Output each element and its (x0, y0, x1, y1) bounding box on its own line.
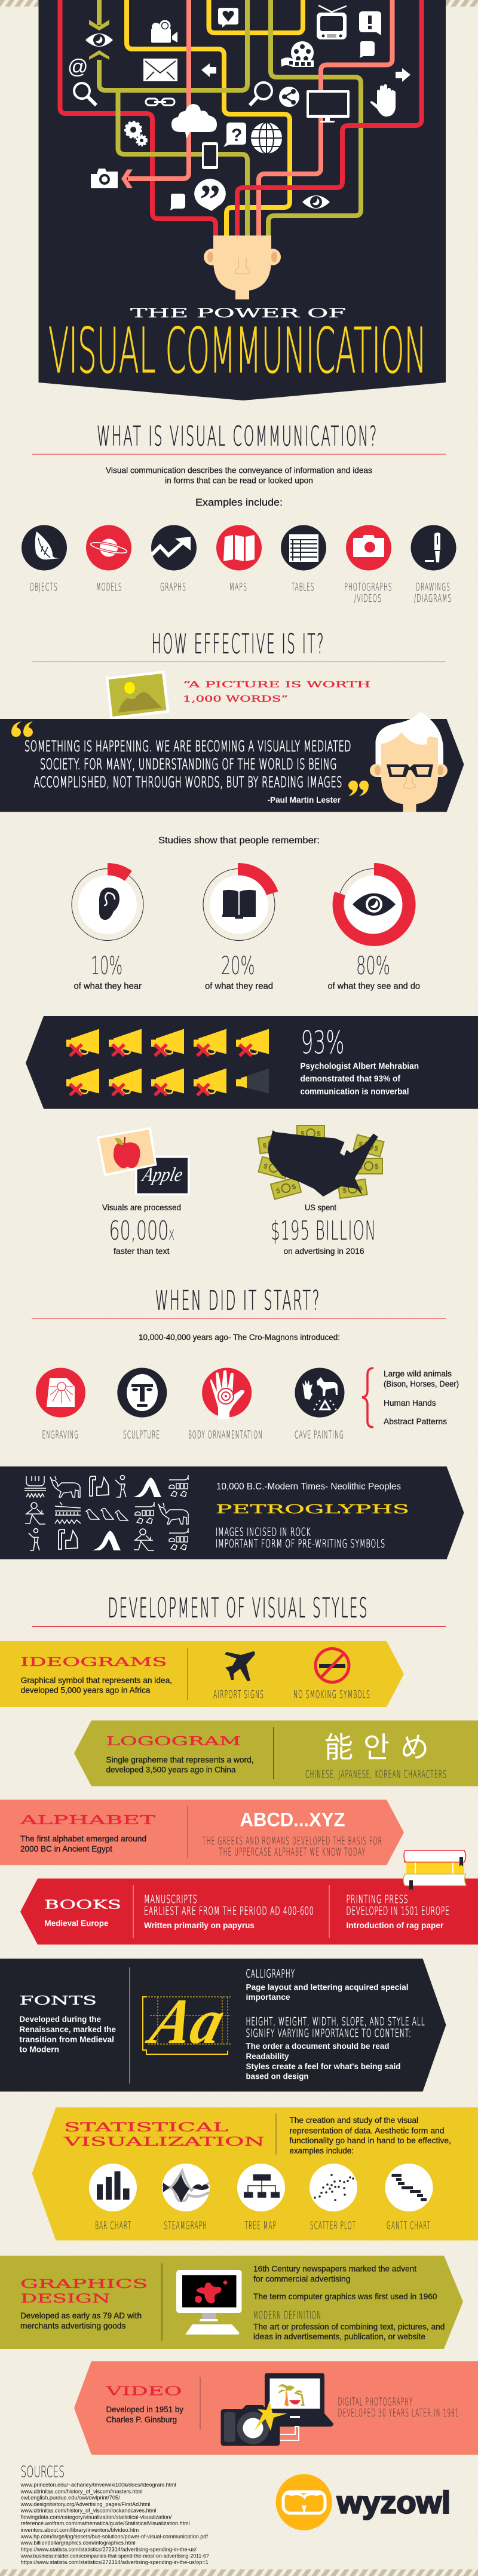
visuals stat: 60,000X (109, 1216, 174, 1246)
sources list: flowingdata.com/category/visualization/statistical-visualization/ (21, 2514, 172, 2520)
band description: Graphical symbol that represents an idea, (21, 1675, 172, 1685)
band description: functionality go hand in hand to be effective, (289, 2136, 451, 2145)
icon: cloud (171, 104, 217, 139)
band title (20, 2277, 148, 2306)
sources list: reference.wolfram.com/mathematica/guide/StatisticalVisualization.html (21, 2520, 190, 2526)
printing press text (347, 1893, 449, 1930)
labels: example types: OBJECTS (30, 581, 58, 593)
divider (329, 1885, 330, 1938)
band: statistical visualization (32, 2107, 478, 2240)
labels: prehistoric arts: BODY ORNAMENTATION (188, 1428, 263, 1442)
icon: at sign: @ (68, 56, 88, 78)
calligraphy text: Page layout and lettering acquired special (246, 1982, 409, 1991)
band title (63, 2120, 265, 2149)
icon: video camera (151, 20, 177, 43)
labels (95, 2220, 431, 2232)
labels: example types (30, 581, 452, 605)
band title: FONTS (19, 1993, 97, 2008)
icon: question bubble: ? (231, 126, 242, 145)
icon: tree map (237, 2164, 285, 2211)
quote: picture worth: 1,000 WORDS” (183, 695, 288, 704)
band title: GRAPHICS (20, 2277, 148, 2291)
icon: us map with money (258, 1125, 384, 1200)
labels: example types: /VIDEOS (354, 592, 382, 605)
divider (200, 2377, 201, 2430)
studies label: Studies show that people remember: (158, 836, 320, 846)
icon: gears (125, 122, 147, 146)
cave painting subjects: (Bison, Horses, Deer) (384, 1379, 459, 1388)
variation text (246, 2015, 425, 2081)
wordmark: wyzowl (336, 2485, 451, 2520)
icon: steamgraph (162, 2164, 210, 2211)
labels (213, 1688, 370, 1701)
labels: BAR CHART (95, 2220, 131, 2232)
variation text: based on design (246, 2072, 308, 2081)
band shape (74, 2361, 478, 2455)
advertising stat: US spent (305, 1203, 336, 1212)
band description: representation of data. Aesthetic form and (289, 2125, 445, 2135)
icon: body ornamentation hand (202, 1367, 252, 1419)
icon: book stack (403, 1850, 466, 1890)
labels: example types: PHOTOGRAPHS (344, 581, 392, 593)
panel: lester quote banner (0, 719, 464, 812)
band: ideograms (0, 1641, 404, 1707)
band description: merchants advertising goods (20, 2321, 125, 2330)
band description: Renaissance, marked the (19, 2024, 116, 2034)
modern definition: MODERN DEFINITION (253, 2309, 321, 2321)
icon: bar chart (89, 2164, 137, 2211)
digital photography text (338, 2396, 459, 2419)
labels: example types: MAPS (229, 581, 247, 593)
icon: maps (216, 525, 262, 570)
CJK characters: め (400, 1732, 429, 1764)
band description (289, 2115, 451, 2155)
logo: wyzowl (276, 2474, 451, 2531)
stat values: 20% (221, 951, 255, 980)
title: the power of: THE POWER OF (130, 306, 346, 321)
stat captions: of what they see and do (327, 981, 420, 991)
labels: TREE MAP (245, 2220, 277, 2232)
stat captions: of what they hear (74, 981, 142, 991)
sources list: www.citrinitas.com/history_of_viscom/rockandcaves.html (20, 2508, 157, 2514)
petroglyphs text: 10,000 B.C.-Modern Times- Neolithic Peoples (216, 1482, 401, 1492)
band shape (20, 1879, 478, 1945)
icon: graphs arrow (151, 525, 197, 570)
icon: objects leaf (22, 525, 67, 570)
band description (20, 2311, 142, 2330)
quote: picture worth: “A PICTURE IS WORTH (183, 680, 370, 690)
CJK characters: 안 (363, 1732, 390, 1764)
icon: camera (91, 169, 118, 188)
cave painting subjects: Abstract Patterns (384, 1417, 447, 1426)
icon: cave painting (295, 1367, 344, 1418)
band title: VISUALIZATION (63, 2134, 265, 2149)
visuals stat (102, 1203, 181, 1256)
icon: envelope (143, 59, 177, 81)
band title: IDEOGRAMS (20, 1654, 167, 1669)
CJK characters: 能 (324, 1732, 353, 1764)
divider (273, 1727, 274, 1779)
modern definition (253, 2309, 445, 2341)
cave painting subjects: Large wild animals (384, 1369, 452, 1378)
petroglyphs text: PETROGLYPHS (216, 1502, 409, 1516)
icon: monitor (307, 90, 350, 123)
intro text: 10,000-40,000 years ago- The Cro-Magnons introduced: (139, 1332, 340, 1342)
icon: airplane (225, 1651, 255, 1681)
band description: transition from Medieval (19, 2035, 114, 2044)
manuscripts text: EARLIEST ARE FROM THE PERIOD AD 400-600 (144, 1904, 314, 1917)
definition text (106, 465, 372, 485)
icon: drawings pen (411, 525, 456, 570)
definition text: Visual communication describes the conveyance of information and ideas (106, 465, 372, 475)
variation text: Readability (246, 2051, 289, 2061)
chart: 20 percent book (203, 863, 278, 941)
icon: man with glasses (370, 712, 448, 812)
band description: Developed during the (19, 2014, 101, 2024)
icon grid: megaphones (66, 1029, 269, 1095)
nonverbal text: demonstrated that 93% of (300, 1073, 401, 1084)
examples label: Examples include: (195, 497, 283, 508)
divider (161, 2263, 163, 2341)
manuscripts text (144, 1893, 314, 1930)
band description: examples include: (289, 2146, 354, 2155)
visuals stat: Visuals are processed (102, 1203, 181, 1212)
bottom decorative stripe (0, 2569, 478, 2576)
modern definition: ideas in advertisements, publication, or website (253, 2332, 425, 2341)
band description (20, 1834, 146, 1853)
icon: sculpture mask (117, 1367, 167, 1418)
printing press text: PRINTING PRESS (347, 1893, 409, 1906)
labels: prehistoric arts: ENGRAVING (42, 1428, 79, 1442)
icon: apple word card: Apple (140, 1164, 185, 1186)
icon: magnifier left (74, 83, 96, 105)
calligraphy text (246, 1968, 409, 2002)
petroglyphs text: IMAGES INCISED IN ROCK (216, 1525, 311, 1538)
panel: sources (20, 2464, 209, 2565)
icon: engraving (36, 1367, 85, 1418)
panel: what is visual communication (22, 421, 456, 605)
icon: quote bubble: ” (200, 177, 220, 223)
band: logogram (74, 1720, 478, 1786)
sample letters: ABCD...XYZ (240, 1809, 345, 1830)
icon: heart bubble (218, 8, 238, 27)
icon: small speech bubble (360, 41, 375, 58)
sources list: https://www.statista.com/statistics/272314/advertising-spending-in-the-us/ (21, 2546, 197, 2552)
stat captions: of what they read (205, 981, 273, 991)
icon: eye bottom (302, 195, 330, 209)
band: books (20, 1850, 478, 1945)
icon: eye top (85, 33, 113, 47)
icon: arrow chevrons on olive pipe (89, 20, 109, 60)
icon: computer with paint blot (176, 2270, 241, 2335)
stat: 93 percent: 93% (301, 1024, 344, 1061)
labels: SCATTER PLOT (310, 2220, 356, 2232)
nonverbal text: communication is nonverbal (300, 1087, 409, 1097)
modern definition: The art or profession of combining text, pictures, and (253, 2321, 445, 2331)
calligraphy text: CALLIGRAPHY (246, 1968, 295, 1981)
quote: picture worth (183, 680, 370, 704)
icon: opening quote marks (11, 721, 33, 737)
icon: no smoking (315, 1648, 349, 1682)
sources list: www.hp.com/large/ipg/assets/bus-solutions/power-of-visual-communication.pdf (20, 2534, 208, 2540)
icon: apple word card (135, 1156, 190, 1195)
chart: 10 percent ear (72, 863, 143, 941)
band description (19, 2014, 116, 2054)
band title: VIDEO (105, 2384, 182, 2398)
top decorative stripe (0, 0, 478, 7)
band shape (0, 2256, 463, 2349)
icon: laptop and camera (221, 2373, 333, 2446)
band title: STATISTICAL (64, 2120, 229, 2134)
sources list: www.businessinsider.com/companies-that-spend-the-most-on-advertising-2011-6? (20, 2553, 209, 2559)
panel: hero banner (38, 0, 446, 400)
band title: DESIGN (20, 2292, 111, 2306)
icon: phone (202, 142, 218, 169)
icon: globe (251, 123, 282, 154)
band description: Developed in 1951 by (106, 2404, 183, 2414)
stat values: 10% (91, 951, 122, 980)
labels: example types: TABLES (292, 581, 314, 593)
band: video (74, 2361, 478, 2455)
history text: 16th Century newspapers marked the advent (253, 2264, 416, 2274)
labels: prehistoric arts: CAVE PAINTING (295, 1428, 344, 1442)
icon: models planet (86, 525, 131, 570)
icon: tables (281, 525, 326, 570)
stat values: 80% (356, 951, 390, 980)
variation text: The order a document should be read (246, 2041, 390, 2051)
printing press text: Introduction of rag paper (347, 1920, 444, 1930)
icon: photographs camera (346, 525, 391, 570)
chart: 80 percent eye (333, 863, 416, 946)
band description: 2000 BC in Ancient Egypt (20, 1844, 112, 1853)
cave painting subjects (384, 1369, 459, 1426)
icon: scatter plot (310, 2164, 357, 2211)
divider (129, 1968, 130, 2084)
divider (133, 1885, 134, 1938)
advertising stat (271, 1203, 376, 1256)
icons: petroglyph figures (24, 1475, 188, 1550)
band shape (0, 1641, 404, 1707)
band description (21, 1675, 172, 1695)
panel: petroglyphs band (0, 1467, 464, 1559)
icon: hand (370, 84, 396, 117)
band shape (74, 1720, 478, 1786)
calligraphy text: importance (246, 1992, 290, 2002)
sources list: inventors.about.com/library/inventors/blvideo.htm (21, 2527, 139, 2533)
heading rule (32, 1318, 446, 1319)
sources list: www.designhistory.org/Advertising_pages/FirstAd.html (20, 2501, 151, 2507)
band: fonts (0, 1959, 446, 2092)
panel: development of visual styles (0, 1592, 478, 2455)
band description: Charles P. Ginsburg (106, 2415, 177, 2424)
petroglyphs text (216, 1482, 409, 1550)
icon: owl badge (276, 2474, 332, 2531)
icon: film reel (281, 41, 314, 67)
quote attribution: -Paul Martin Lester (268, 795, 341, 804)
icon: apple photo (97, 1127, 157, 1176)
band description: developed 5,000 years ago in Africa (21, 1685, 151, 1695)
icon: gantt chart (385, 2164, 433, 2211)
history text: for commercial advertising (253, 2274, 350, 2283)
stat values (91, 951, 390, 980)
icon: picture (106, 671, 170, 720)
icon: calligraphy specimen: Aa (140, 1985, 232, 2057)
band subtitle: Medieval Europe (44, 1919, 109, 1928)
stat captions (74, 981, 420, 991)
nonverbal text (300, 1061, 419, 1097)
band shape (0, 1959, 446, 2092)
icon: closing quote marks (348, 781, 369, 796)
labels: STEAMGRAPH (164, 2220, 207, 2232)
heading rule (32, 1626, 446, 1627)
labels: NO SMOKING SYMBOLS (293, 1688, 370, 1701)
band description (106, 1755, 253, 1774)
band: statistical visualization: GANTT CHART (387, 2220, 431, 2232)
band: alphabet (0, 1800, 404, 1865)
panel: when did it start (0, 1285, 464, 1559)
labels: AIRPORT SIGNS (213, 1688, 264, 1701)
panel: nonverbal band (26, 1016, 478, 1109)
band shape (32, 2107, 478, 2240)
band description: Developed as early as 79 AD with (20, 2311, 142, 2320)
icon: right arrow (396, 68, 410, 82)
icon: salmon arrow head (121, 170, 133, 188)
sources list: www.billiondollargraphics.com/infographics.html (20, 2540, 136, 2546)
advertising stat: $195 BILLION (271, 1216, 376, 1246)
history text: The term computer graphics was first used in 1960 (253, 2292, 437, 2301)
band description: to Modern (19, 2044, 59, 2054)
band description: developed 3,500 years ago in China (106, 1764, 236, 1774)
icon: television (317, 5, 347, 39)
labels: prehistoric arts (42, 1428, 344, 1442)
sources list: owl.english.purdue.edu/owl/owlprint/705/ (21, 2495, 120, 2501)
cave painting subjects: Human Hands (384, 1398, 436, 1408)
band title: ALPHABET (19, 1813, 156, 1827)
labels: prehistoric arts: SCULPTURE (123, 1428, 160, 1442)
heading rule (32, 454, 446, 455)
sources list (20, 2482, 209, 2565)
band: graphics design (0, 2256, 463, 2349)
icon: exclamation bubble (359, 11, 381, 35)
icon: chain link (146, 99, 174, 105)
icon: question bubble (223, 123, 246, 147)
icon: red brace (362, 1368, 373, 1427)
advertising stat: on advertising in 2016 (283, 1246, 364, 1256)
icon: left arrow (201, 63, 216, 77)
sources list: https://www.statista.com/statistics/272314/advertising-spending-in-the-us/op=1 (21, 2559, 209, 2565)
manuscripts text: Written primarily on papyrus (144, 1920, 255, 1930)
definition text: in forms that can be read or looked upon (165, 476, 313, 485)
labels: example types: MODELS (96, 581, 122, 593)
icon: small speech bubble lower (170, 194, 185, 210)
manuscripts text: MANUSCRIPTS (144, 1893, 198, 1906)
band description (106, 2404, 183, 2424)
icon: head (204, 235, 281, 299)
caption (203, 1835, 382, 1859)
band description: The creation and study of the visual (289, 2115, 418, 2125)
icon: magnifier right (250, 82, 272, 105)
nonverbal text: Psychologist Albert Mehrabian (300, 1061, 419, 1071)
panel: how effective is it (0, 628, 478, 1256)
band shape (0, 1800, 404, 1865)
quote text (24, 738, 351, 791)
sources list: www.princeton.edu/~achaney/tmve/wiki100k/docs/Ideogram.html (20, 2482, 176, 2488)
pipes (60, 0, 422, 235)
history text (253, 2264, 437, 2301)
sources heading: SOURCES (20, 2464, 65, 2482)
icon: share (279, 87, 299, 107)
visuals stat: faster than text (114, 1246, 170, 1256)
band title: LOGOGRAM (106, 1734, 241, 1748)
variation text: Styles create a feel for what's being said (246, 2061, 400, 2071)
band title: BOOKS (44, 1897, 121, 1911)
band description: The first alphabet emerged around (20, 1834, 146, 1843)
sources list: www.citrinitas.com/history_of_viscom/masters.html (20, 2489, 143, 2495)
divider (276, 2113, 277, 2155)
labels: example types: GRAPHS (160, 581, 186, 593)
icon: quote bubble (194, 177, 226, 223)
band description: Single grapheme that represents a word, (106, 1755, 253, 1764)
banner shape (38, 0, 446, 400)
